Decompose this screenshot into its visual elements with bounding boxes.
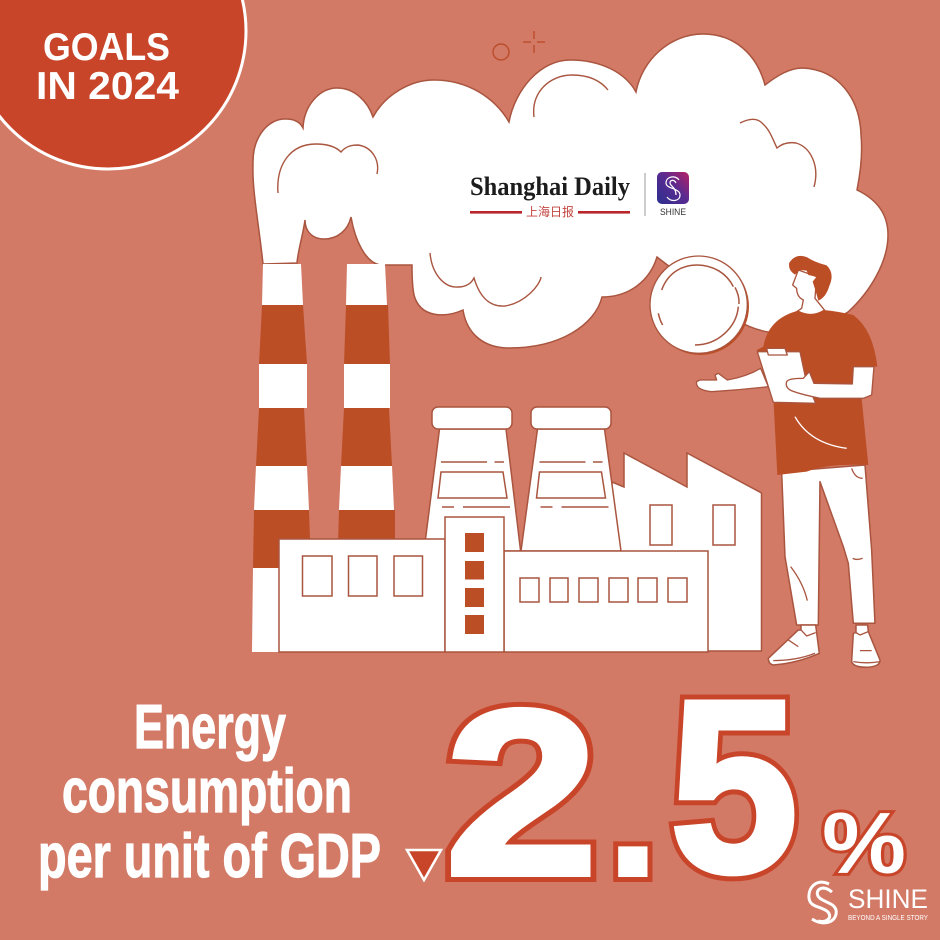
big number 2.5 percent	[445, 649, 906, 924]
factory centre tower	[445, 517, 504, 652]
t-shirt	[757, 310, 877, 475]
big number 2.5 percent: 2	[445, 661, 598, 924]
right shoe	[852, 625, 880, 667]
big number 2.5 percent: %	[822, 796, 906, 892]
heading: energy consumption per unit of GDP: per unit of GDP	[38, 822, 381, 891]
chimney right	[338, 264, 395, 545]
badge: goals in 2024: IN 2024	[36, 65, 179, 108]
decorative sparkle icons	[493, 31, 545, 60]
hair	[789, 256, 832, 301]
trousers	[782, 465, 875, 625]
outstretched arm	[697, 368, 768, 392]
cooling tower left	[424, 407, 521, 551]
logo: Shanghai Daily and SHINE	[470, 172, 689, 219]
person with clipboard	[697, 256, 880, 667]
clothing fold lines	[773, 468, 880, 663]
left shoe	[768, 625, 819, 665]
SHINE watermark: SHINE	[848, 884, 928, 914]
heading: energy consumption per unit of GDP: consumption	[62, 757, 352, 826]
SHINE watermark	[809, 882, 928, 923]
clipboard	[757, 352, 816, 403]
heading: energy consumption per unit of GDP: Energy	[134, 693, 286, 762]
shirt crease	[795, 417, 847, 448]
magnifier lens	[650, 256, 749, 355]
factory right building	[504, 551, 708, 652]
big number 2.5 percent: .	[610, 725, 656, 909]
factory left building	[279, 539, 445, 652]
face and neck	[793, 270, 825, 315]
SHINE watermark: BEYOND A SINGLE STORY	[848, 915, 928, 922]
big number 2.5 percent: 5	[670, 649, 798, 923]
chimney left	[252, 264, 311, 652]
icon: down triangle	[407, 850, 441, 880]
cooling tower right	[521, 407, 621, 551]
big number 2.5 percent: %	[822, 796, 906, 892]
logo: Shanghai Daily and SHINE: 上海日报	[526, 204, 574, 219]
big number 2.5 percent: 5	[670, 649, 798, 923]
smoke cloud	[253, 34, 888, 348]
big number 2.5 percent: .	[610, 725, 656, 909]
holding arm	[786, 367, 874, 398]
clipboard clip	[767, 348, 787, 355]
factory back hall	[610, 453, 762, 651]
logo: Shanghai Daily and SHINE: SHINE	[660, 207, 686, 217]
badge: goals in 2024	[0, 0, 246, 169]
logo: Shanghai Daily and SHINE: Shanghai Daily	[470, 172, 630, 201]
big number 2.5 percent: 2	[445, 661, 598, 924]
heading: energy consumption per unit of GDP	[38, 693, 381, 891]
badge: goals in 2024: GOALS	[43, 26, 170, 69]
